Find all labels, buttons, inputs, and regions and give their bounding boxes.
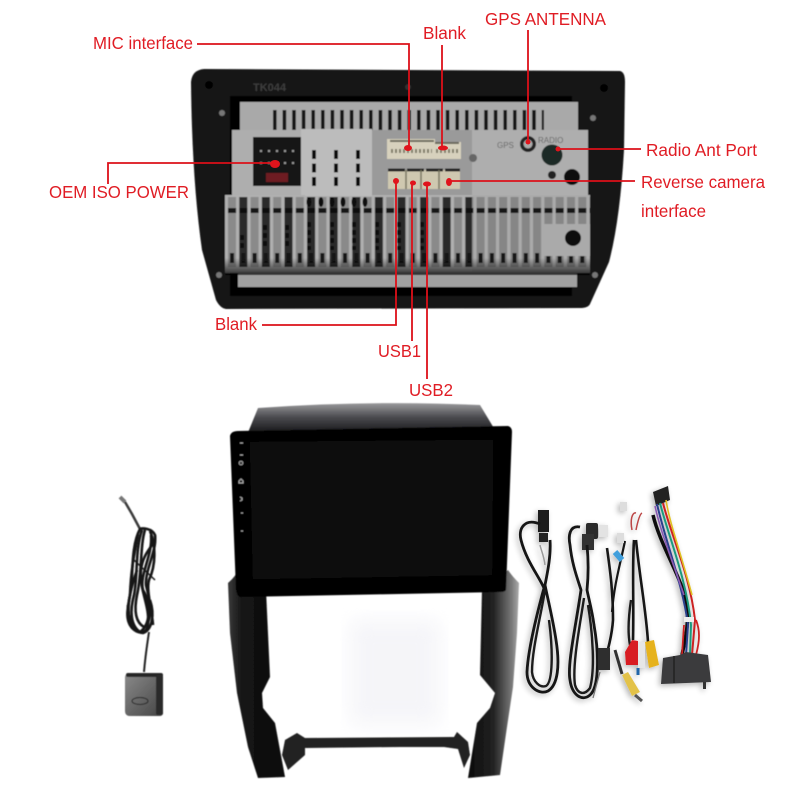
power harness xyxy=(653,486,711,689)
left leg xyxy=(228,570,285,778)
label: interface: interface xyxy=(641,201,706,221)
label: Reverse camera: Reverse camera xyxy=(641,172,765,192)
fin shadow xyxy=(225,258,590,275)
vented inner plate xyxy=(301,129,372,195)
lower white connectors xyxy=(388,170,460,189)
cable loop one xyxy=(520,510,558,692)
connector markers xyxy=(270,140,560,186)
label: OEM ISO POWER: OEM ISO POWER xyxy=(49,182,189,202)
top vented plate xyxy=(240,102,578,134)
model mark: TK044 xyxy=(253,82,287,94)
middle metal plate xyxy=(232,130,588,196)
GPS antenna xyxy=(120,497,163,716)
label: USB1: USB1 xyxy=(378,341,421,361)
bottom plate xyxy=(238,272,577,287)
heat sink fins xyxy=(225,190,590,273)
antenna adapter xyxy=(593,533,625,698)
label: USB2: USB2 xyxy=(409,380,453,400)
screws xyxy=(205,81,608,278)
rear panel photo xyxy=(191,69,625,309)
right plate holes xyxy=(469,136,580,185)
label: MIC interface: MIC interface xyxy=(93,33,193,53)
antenna plug and lead xyxy=(120,497,125,502)
leader lines xyxy=(108,30,641,379)
lower cross bar xyxy=(282,732,470,770)
ISO block xyxy=(661,652,711,684)
touch keys xyxy=(239,443,243,531)
top hood xyxy=(247,403,498,435)
display xyxy=(250,440,493,579)
connector recess xyxy=(372,130,472,196)
upper white connectors xyxy=(387,139,461,159)
head unit with frame xyxy=(228,403,519,778)
cable accessories xyxy=(520,486,711,701)
label: Radio Ant Port: Radio Ant Port xyxy=(646,140,757,160)
screen bezel xyxy=(230,426,512,597)
frame opening shadow xyxy=(350,620,440,725)
antenna module xyxy=(125,673,163,716)
RCA harness xyxy=(615,502,659,701)
black bezel xyxy=(191,69,625,309)
label: Blank bottom: Blank xyxy=(215,314,257,334)
label: Blank top: Blank xyxy=(423,23,466,43)
cable loop two xyxy=(569,523,608,698)
label: GPS ANTENNA: GPS ANTENNA xyxy=(485,9,606,29)
right leg xyxy=(468,570,519,778)
cable to module xyxy=(144,632,149,672)
right plate holes: GPS xyxy=(497,141,514,150)
right plate holes: RADIO xyxy=(538,136,563,145)
cable coil xyxy=(127,529,155,633)
OEM ISO socket xyxy=(253,137,301,186)
